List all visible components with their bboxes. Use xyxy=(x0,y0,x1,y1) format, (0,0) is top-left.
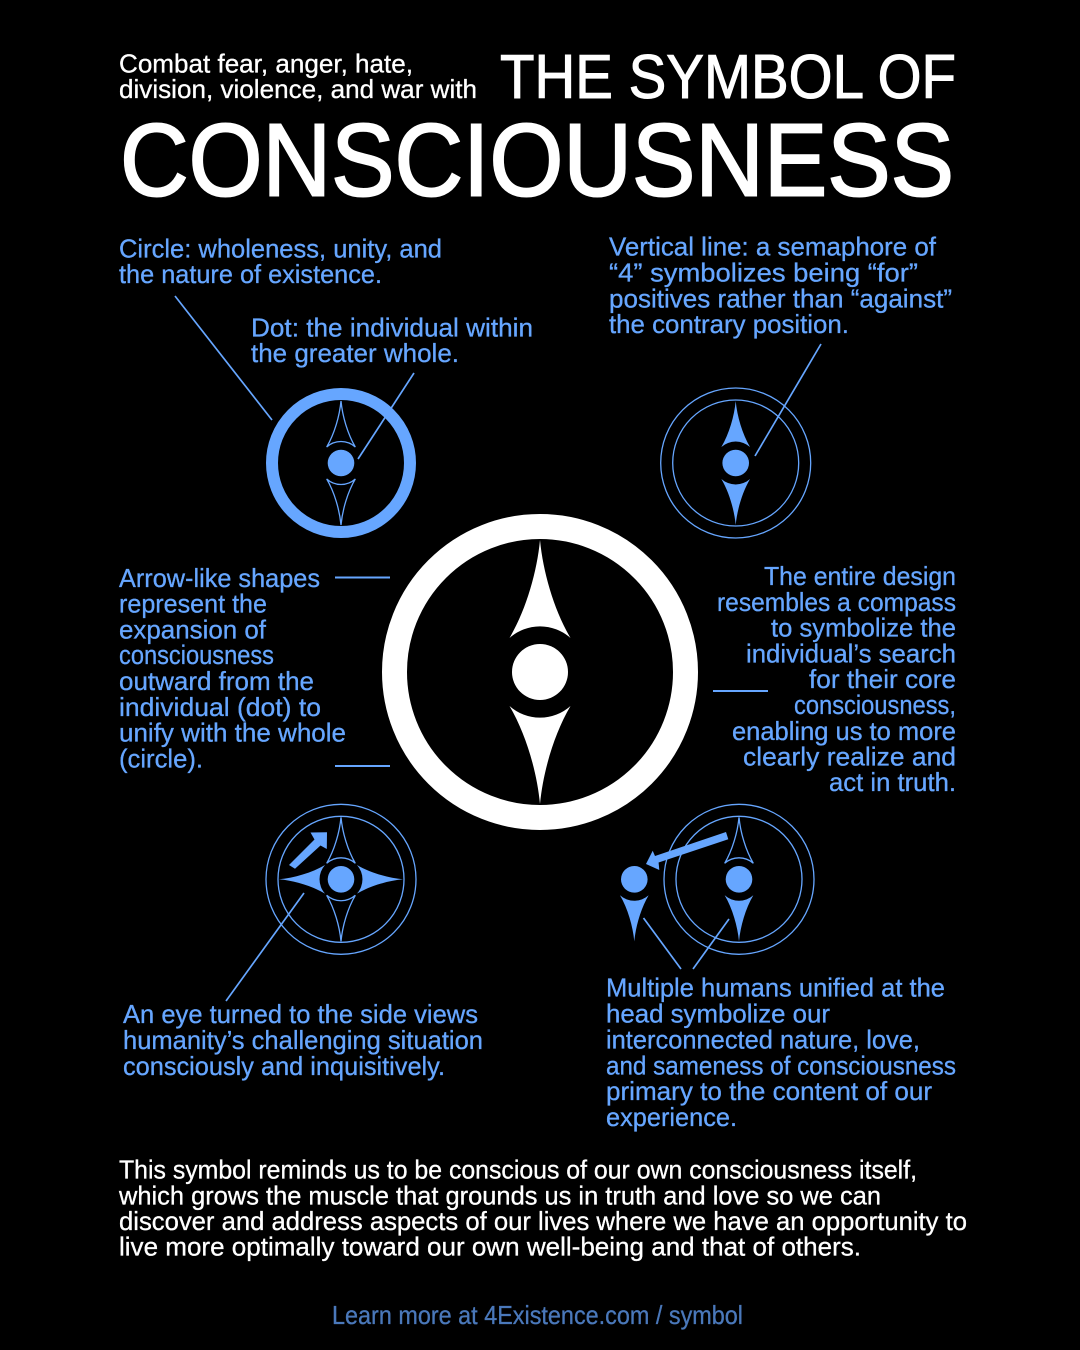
callout: entire design: The entire design xyxy=(764,561,956,591)
callout: arrow-like shapes: represent the xyxy=(119,588,267,618)
footer link: Learn more at 4Existence.com / symbol xyxy=(332,1300,743,1330)
arrow: up and to the right xyxy=(289,832,327,869)
leader line: first figure xyxy=(693,919,729,969)
closing paragraph: discover and address aspects of our lives where we have an opportunity to xyxy=(119,1206,967,1236)
callout: entire design: individual’s search xyxy=(746,638,956,668)
intro text xyxy=(119,48,477,104)
callout: multiple humans xyxy=(606,972,956,1132)
callout: dot xyxy=(251,312,533,368)
callout: entire design xyxy=(717,561,956,797)
callout: circle: Circle: wholeness, unity, and xyxy=(119,234,442,264)
leader line: circle xyxy=(175,296,272,420)
callout: entire design: clearly realize and xyxy=(743,742,956,772)
closing paragraph: which grows the muscle that grounds us in truth and love so we can xyxy=(118,1180,881,1210)
callout: vertical line: the contrary position. xyxy=(609,309,849,339)
icon: symbol with multiple humans unified at the head xyxy=(620,804,814,954)
icon: symbol highlighting vertical line xyxy=(661,388,811,538)
callout: arrow-like shapes: outward from the xyxy=(119,666,314,696)
leader line: dot xyxy=(358,373,414,459)
callout: arrow-like shapes xyxy=(119,563,346,774)
arrow: toward second figure xyxy=(646,832,728,870)
callout: entire design: consciousness, xyxy=(794,690,956,720)
callout: circle: the nature of existence. xyxy=(119,259,382,289)
leader line: arrow bottom xyxy=(335,765,390,767)
leader line: compass xyxy=(713,690,768,692)
callout: multiple humans: primary to the content of our xyxy=(606,1076,932,1106)
closing paragraph xyxy=(118,1154,967,1262)
icon: symbol with eye turned to the side xyxy=(266,804,416,954)
callout: multiple humans: Multiple humans unified at the xyxy=(606,972,945,1002)
callout: vertical line: positives rather than “against” xyxy=(609,284,952,314)
callout: entire design: act in truth. xyxy=(829,767,956,797)
icon: symbol highlighting circle and dot xyxy=(272,394,410,532)
callout: dot: the greater whole. xyxy=(251,338,459,368)
callout: vertical line xyxy=(609,232,952,339)
callout: eye turned to the side xyxy=(123,999,483,1081)
heading: the symbol of: THE SYMBOL OF xyxy=(500,43,956,112)
callout: circle xyxy=(119,234,442,289)
leader line: arrow top xyxy=(335,576,390,578)
callout: arrow-like shapes: (circle). xyxy=(119,744,203,774)
leader line: eye xyxy=(226,893,304,1001)
callout: vertical line: “4” symbolizes being “for” xyxy=(609,258,918,288)
callout: arrow-like shapes: consciousness xyxy=(119,640,274,670)
callout: entire design: enabling us to more xyxy=(732,716,956,746)
closing paragraph: This symbol reminds us to be conscious of our own consciousness itself, xyxy=(119,1154,917,1184)
callout: entire design: for their core xyxy=(809,664,956,694)
leader line: vertical line xyxy=(755,344,821,456)
callout: multiple humans: experience. xyxy=(606,1102,737,1132)
leader line: second figure xyxy=(644,918,681,969)
callout: eye turned to the side: consciously and inquisitively. xyxy=(123,1051,445,1081)
callout: eye turned to the side: humanity’s challenging situation xyxy=(123,1025,483,1055)
icon: central symbol of consciousness xyxy=(394,526,686,818)
callout: eye turned to the side: An eye turned to the side views xyxy=(123,999,478,1029)
header: title block xyxy=(119,43,956,218)
callout: multiple humans: head symbolize our xyxy=(606,998,830,1028)
intro text: division, violence, and war with xyxy=(119,74,477,104)
callout: multiple humans: and sameness of consciousness xyxy=(606,1050,956,1080)
closing paragraph: live more optimally toward our own well-being and that of others. xyxy=(119,1232,861,1262)
callout: arrow-like shapes: Arrow-like shapes xyxy=(119,563,320,593)
callout: dot: Dot: the individual within xyxy=(251,312,533,342)
second human figure xyxy=(620,866,649,941)
callout: entire design: resembles a compass xyxy=(717,587,956,617)
callout: arrow-like shapes: individual (dot) to xyxy=(119,692,321,722)
callout: entire design: to symbolize the xyxy=(771,612,956,642)
callout: arrow-like shapes: unify with the whole xyxy=(119,718,346,748)
callout: arrow-like shapes: expansion of xyxy=(119,614,267,644)
heading: consciousness: CONSCIOUSNESS xyxy=(120,102,954,218)
intro text: Combat fear, anger, hate, xyxy=(119,48,413,78)
callout: multiple humans: interconnected nature, love, xyxy=(606,1024,920,1054)
callout: vertical line: Vertical line: a semaphore of xyxy=(609,232,937,262)
